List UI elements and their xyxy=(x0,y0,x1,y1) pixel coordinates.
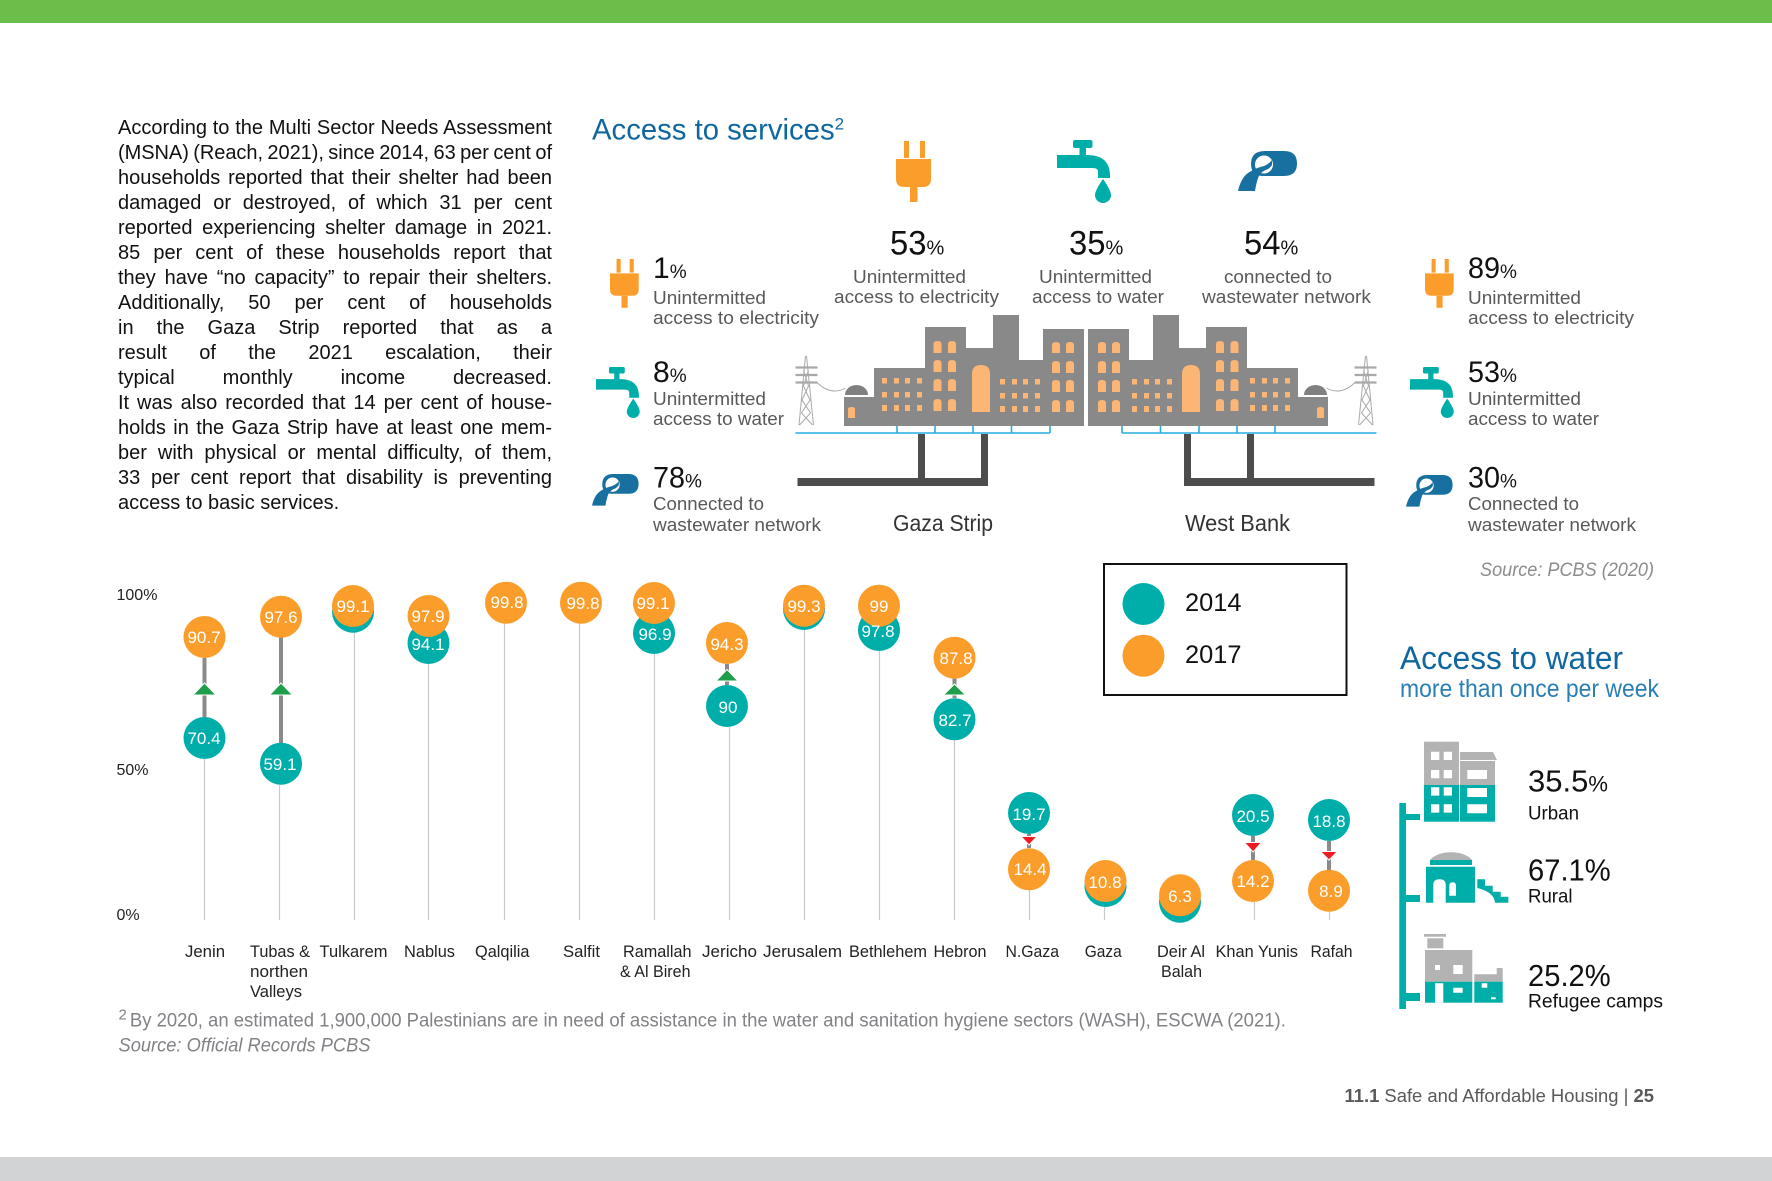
label: unintermitted electricity: Unintermitted xyxy=(853,267,966,287)
icon: wastewater pipe (overall) xyxy=(1238,151,1297,191)
Jenin: 90.7 xyxy=(187,628,221,647)
Jenin xyxy=(184,616,226,759)
source: Source: PCBS (2020) xyxy=(1480,560,1654,581)
stat: 35% water: 35% xyxy=(1069,224,1124,262)
label: wastewater network xyxy=(652,515,822,535)
label: Connected to xyxy=(653,494,764,514)
West Bank stats xyxy=(1406,252,1637,535)
category labels xyxy=(185,942,1352,1001)
icon: electricity plug (overall) xyxy=(896,141,931,202)
label: unintermitted water: Unintermitted xyxy=(1039,267,1152,287)
y axis labels: 100% xyxy=(116,587,157,604)
y axis labels: 50% xyxy=(116,762,149,779)
body text paragraph: ber with physical or mental difficulty, of them, xyxy=(118,442,552,464)
icon: pipe xyxy=(592,474,639,506)
body text paragraph: damaged or destroyed, of which 31 per cent xyxy=(118,192,552,214)
change markers xyxy=(193,670,1338,860)
Nablus: 94.1 xyxy=(411,635,445,654)
category labels: Jenin xyxy=(185,942,225,961)
Jericho: 90 xyxy=(719,698,737,717)
icon: urban buildings xyxy=(1424,742,1497,822)
Tulkarem xyxy=(332,585,374,633)
Deir Al Balah: 6.3 xyxy=(1168,887,1192,906)
Jerusalem xyxy=(783,585,825,630)
category labels: Balah xyxy=(1161,962,1202,981)
Nablus: 97.9 xyxy=(411,607,445,626)
body text paragraph: (MSNA) (Reach, 2021), since 2014, 63 per cent of xyxy=(118,142,552,164)
category labels: Jericho xyxy=(702,942,757,961)
category labels: Salfit xyxy=(563,942,600,961)
stat: 53% electricity: 53% xyxy=(890,224,944,262)
label: access to electricity xyxy=(653,308,819,328)
label: refugee camps: Refugee camps xyxy=(1528,991,1663,1012)
stat: 30%: 30% xyxy=(1468,462,1517,494)
Salfit: 99.8 xyxy=(566,594,600,613)
panel: access to services xyxy=(592,114,1654,581)
Khan Yunis: 14.2 xyxy=(1236,872,1270,891)
bottom grey band xyxy=(0,1157,1772,1181)
label: Unintermitted xyxy=(653,288,766,308)
Khan Yunis xyxy=(1232,794,1274,902)
Rafah xyxy=(1308,799,1350,912)
label xyxy=(1468,288,1634,328)
Nablus xyxy=(408,595,450,664)
stat: 78%: 78% xyxy=(653,462,702,494)
page footer: 11.1 Safe and Affordable Housing | 25 xyxy=(1344,1086,1654,1106)
label: access to water xyxy=(653,409,784,429)
category labels: Deir Al xyxy=(1157,942,1205,961)
icon: tap xyxy=(596,367,640,418)
label: urban: Urban xyxy=(1528,803,1579,824)
stat: 89%: 89% xyxy=(1468,252,1517,285)
body text paragraph xyxy=(118,117,552,514)
category labels: Khan Yunis xyxy=(1216,942,1298,961)
N.Gaza: 19.7 xyxy=(1012,805,1046,824)
stat: 53%: 53% xyxy=(1468,356,1517,389)
body text paragraph: they have “no capacity” to repair their shelters. xyxy=(118,267,552,289)
stems xyxy=(204,623,1330,920)
category labels: Qalqilia xyxy=(475,942,530,961)
Tubas: 59.1 xyxy=(263,755,297,774)
illustration: West Bank city xyxy=(1088,315,1376,486)
category labels: & Al Bireh xyxy=(620,962,690,981)
legend item 2017: 2017 xyxy=(1185,641,1242,669)
category labels: Hebron xyxy=(934,942,986,961)
legend item 2014 xyxy=(1122,583,1242,625)
icon: water tap (overall) xyxy=(1057,140,1111,203)
N.Gaza xyxy=(1008,792,1050,890)
Rafah: 18.8 xyxy=(1312,812,1346,831)
legend item 2017 xyxy=(1122,635,1242,677)
label: connected to wastewater: connected to xyxy=(1224,267,1332,287)
label: unintermitted water xyxy=(1032,267,1164,307)
stat: 8%: 8% xyxy=(653,356,687,389)
stat: 1%: 1% xyxy=(653,252,687,285)
stat: rural: 67.1% xyxy=(1528,853,1611,888)
label: unintermitted electricity xyxy=(834,267,999,307)
Jericho xyxy=(706,622,748,727)
Deir Al Balah xyxy=(1159,874,1201,923)
stat: refugee camps: 25.2% xyxy=(1528,958,1611,993)
category labels: Jerusalem xyxy=(763,942,842,961)
chart source: Source: Official Records PCBS xyxy=(118,1036,371,1056)
category labels: Rafah xyxy=(1310,942,1352,961)
Hebron: 82.7 xyxy=(938,711,972,730)
Salfit xyxy=(560,582,602,624)
chart: access to water by governorate xyxy=(116,582,1352,1001)
category labels: Tulkarem xyxy=(320,942,388,961)
label xyxy=(1468,389,1599,429)
legend item 2014: 2014 xyxy=(1185,589,1242,617)
Qalqilia: 99.8 xyxy=(490,593,524,612)
label: access to water xyxy=(1468,409,1599,429)
connectors xyxy=(204,637,1329,870)
label: Unintermitted xyxy=(1468,288,1581,308)
illustration: Gaza Strip city xyxy=(796,315,1084,486)
label: connected to wastewater xyxy=(1201,267,1372,307)
Gaza: 10.8 xyxy=(1088,873,1122,892)
body text paragraph: 85 per cent of these households report that xyxy=(118,242,552,264)
y axis labels: 0% xyxy=(116,907,140,924)
Tubas: 97.6 xyxy=(264,608,298,627)
label: unintermitted water: access to water xyxy=(1032,287,1164,307)
label: Connected to xyxy=(1468,494,1579,514)
icon: refugee camp xyxy=(1424,934,1503,1003)
label: West Bank: West Bank xyxy=(1185,510,1290,536)
body text paragraph: reported experiencing shelter damage in 2021. xyxy=(118,217,552,239)
label xyxy=(652,494,822,535)
icon: rural house xyxy=(1426,852,1508,903)
body text paragraph: 33 per cent report that disability is preventing xyxy=(118,467,552,489)
category labels: Tubas & xyxy=(250,942,311,961)
Ramallah: 99.1 xyxy=(636,594,670,613)
Jenin: 70.4 xyxy=(187,729,221,748)
category labels: Gaza xyxy=(1085,942,1122,961)
category labels: N.Gaza xyxy=(1006,942,1059,961)
legend xyxy=(1104,564,1346,695)
footnote: By 2020, an estimated 1,900,000 Palestinians are in need of assistance in the water and sanitation hygiene sectors (WASH), ESCWA (2021). xyxy=(130,1010,1286,1032)
label xyxy=(653,389,784,429)
panel: access to water xyxy=(1399,640,1663,1012)
body text paragraph: typical monthly income decreased. xyxy=(118,367,552,389)
Bethlehem xyxy=(858,585,900,651)
category labels: Nablus xyxy=(404,942,455,961)
label: Unintermitted xyxy=(1468,389,1581,409)
N.Gaza: 14.4 xyxy=(1013,860,1047,879)
body text paragraph: in the Gaza Strip reported that as a xyxy=(118,317,552,339)
heading: Access to water xyxy=(1400,640,1623,676)
subheading: more than once per week xyxy=(1400,675,1659,703)
Hebron: 87.8 xyxy=(939,649,973,668)
icon: plug xyxy=(610,259,639,308)
label: Unintermitted xyxy=(653,389,766,409)
Hebron xyxy=(934,637,976,740)
label: unintermitted electricity: access to electricity xyxy=(834,287,999,307)
stat: 54% wastewater: 54% xyxy=(1244,224,1298,262)
bracket xyxy=(1399,803,1420,1009)
Ramallah: 96.9 xyxy=(638,625,672,644)
label: access to electricity xyxy=(1468,308,1634,328)
footnote: 2 xyxy=(118,1006,127,1024)
category labels: Ramallah xyxy=(623,942,692,961)
body text paragraph: According to the Multi Sector Needs Assessment xyxy=(118,117,552,139)
body text paragraph: households reported that their shelter had been xyxy=(118,167,552,189)
category labels: northen xyxy=(250,962,308,981)
icon: plug xyxy=(1425,259,1454,308)
label: rural: Rural xyxy=(1528,887,1572,908)
Rafah: 8.9 xyxy=(1319,882,1343,901)
Ramallah xyxy=(633,582,675,654)
label: wastewater network xyxy=(1467,515,1637,535)
Jericho: 94.3 xyxy=(710,635,744,654)
category labels: Valleys xyxy=(250,982,302,1001)
category labels: Bethlehem xyxy=(849,942,927,961)
y axis labels xyxy=(116,587,157,924)
body text paragraph: result of the 2021 escalation, their xyxy=(118,342,552,364)
top green band xyxy=(0,0,1772,23)
body text paragraph: holds in the Gaza Strip have at least one mem- xyxy=(118,417,552,439)
body text paragraph: Additionally, 50 per cent of households xyxy=(118,292,552,314)
Tulkarem: 99.1 xyxy=(336,597,370,616)
label xyxy=(1467,494,1637,535)
label: connected to wastewater: wastewater network xyxy=(1201,287,1372,307)
Bethlehem: 99 xyxy=(870,597,888,616)
Gaza xyxy=(1084,860,1126,907)
heading: access to services: Access to services xyxy=(592,114,835,146)
icon: tap xyxy=(1410,367,1454,418)
stat: urban: 35.5% xyxy=(1528,764,1608,799)
label: Gaza Strip: Gaza Strip xyxy=(893,510,993,536)
Bethlehem: 97.8 xyxy=(861,622,895,641)
label xyxy=(653,288,819,328)
Khan Yunis: 20.5 xyxy=(1236,807,1270,826)
body text paragraph: access to basic services. xyxy=(118,492,339,514)
Tubas xyxy=(260,596,302,785)
body text paragraph: It was also recorded that 14 per cent of house- xyxy=(118,392,552,414)
Gaza Strip stats xyxy=(592,252,822,535)
icon: pipe xyxy=(1406,475,1453,507)
Jerusalem: 99.3 xyxy=(787,597,821,616)
heading: access to services: 2 xyxy=(835,114,844,134)
Qalqilia xyxy=(485,582,527,624)
